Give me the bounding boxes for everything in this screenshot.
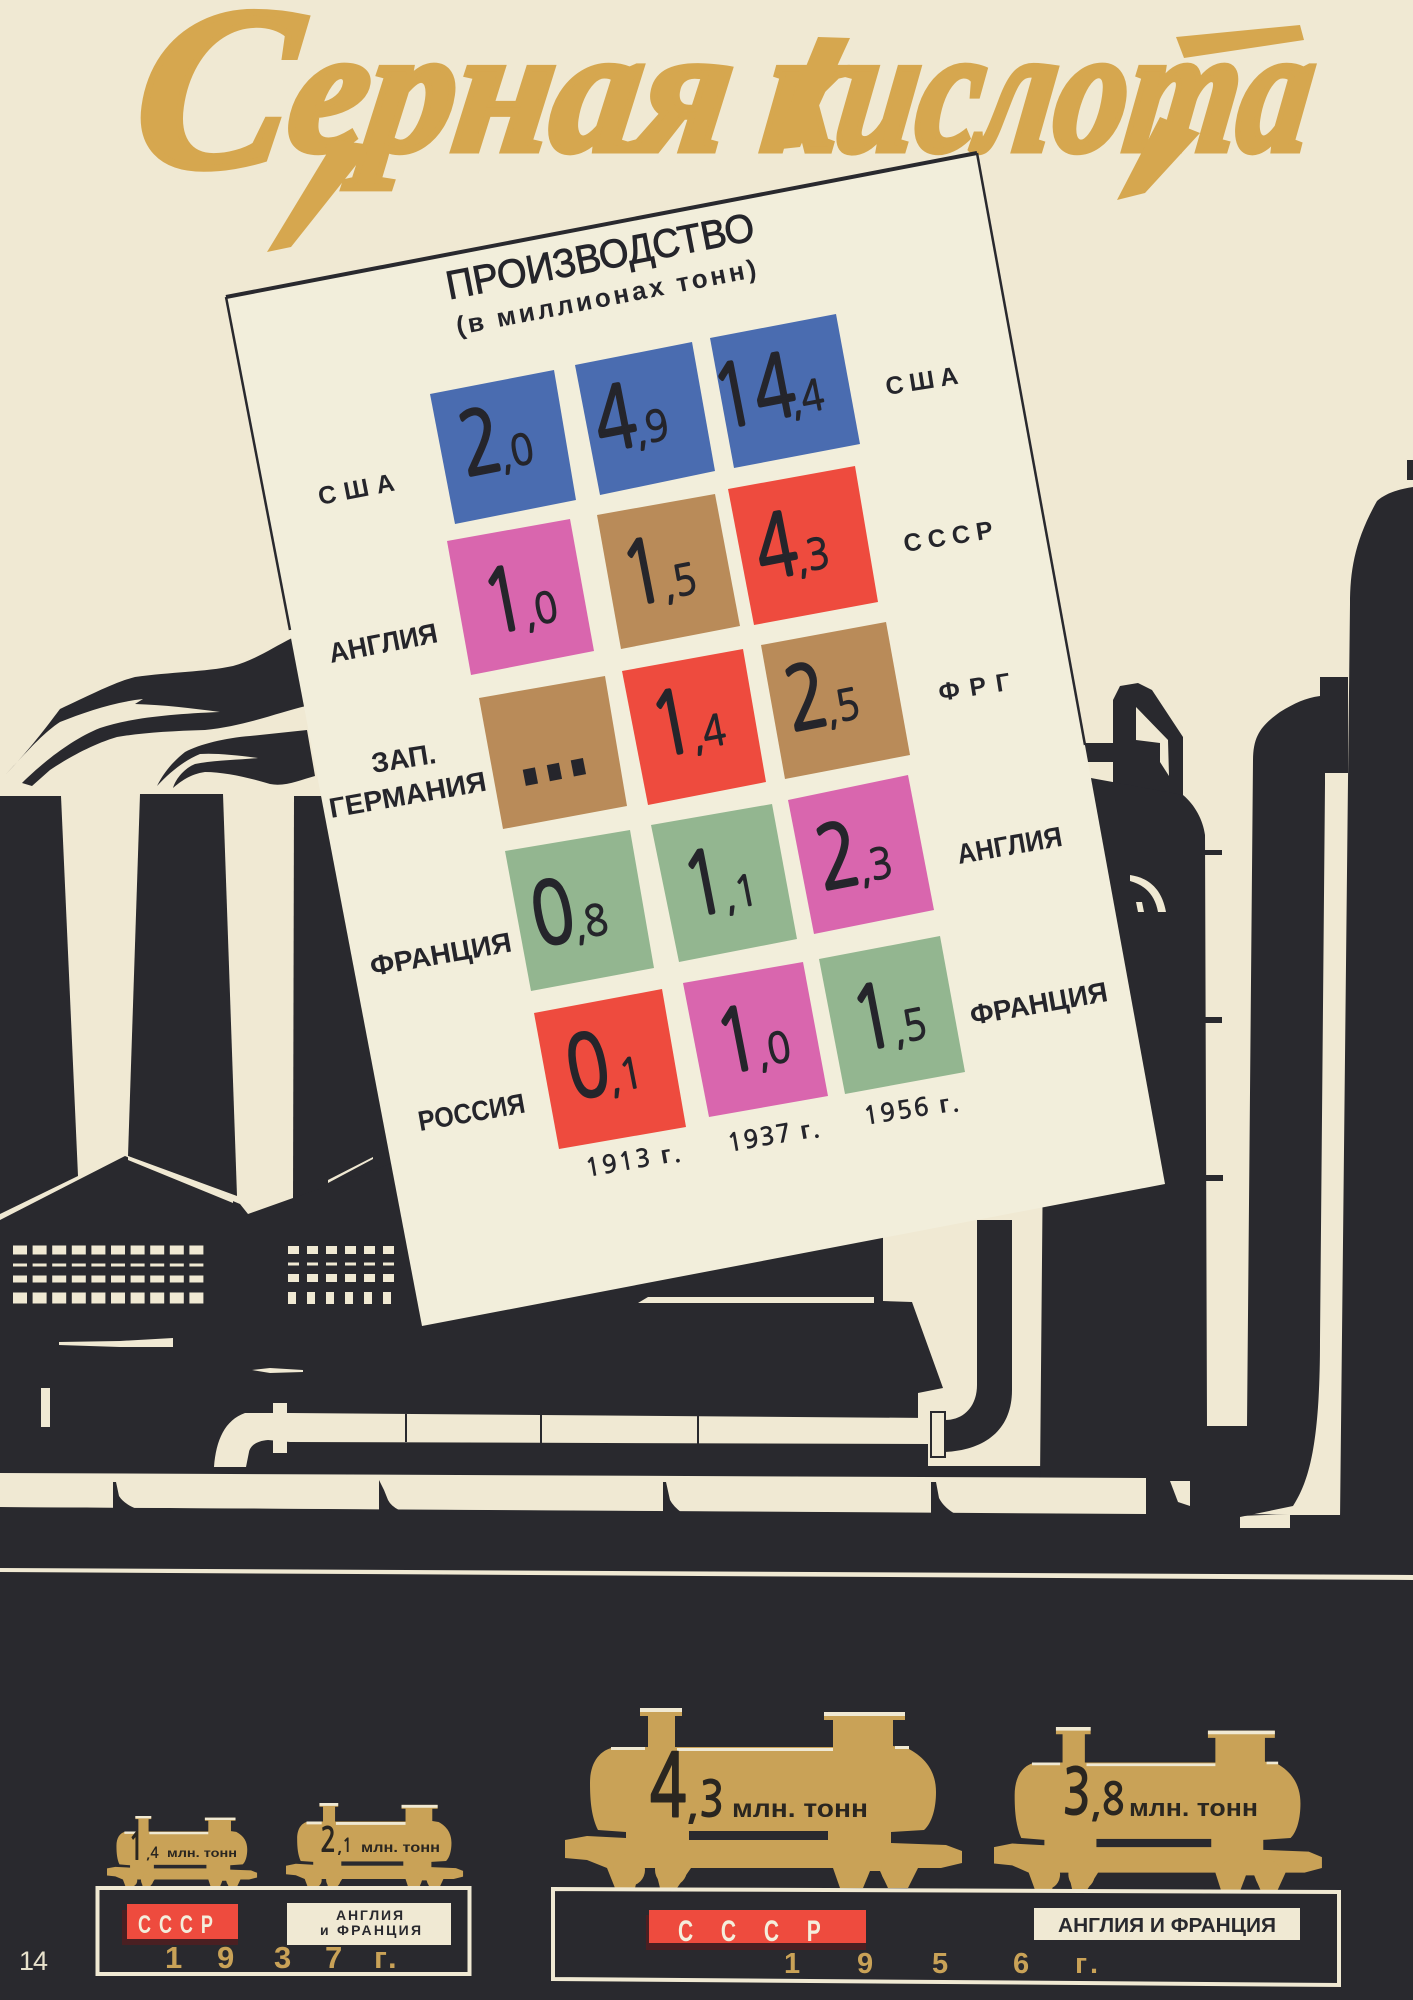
tile: США 1937 4,9: 4 [587,373,643,465]
tile: СССР 1956 4,3: ,3 [792,531,833,579]
tile: СССР 1956 4,3: 4 [748,501,804,593]
horizontal white pipe [214,1403,945,1467]
tank label: 1,4 млн. тонн: ,4 [146,1847,159,1861]
tank label: 1,4 млн. тонн: млн. тонн [167,1846,237,1860]
right country labels: США [884,362,960,401]
building details and roof lines [0,1156,874,1427]
left country labels: ГЕРМАНИЯ [327,766,489,824]
card background [226,153,1165,1326]
tile: Франция 1913 0,8 [505,830,654,991]
tank label: 2,1 млн. тонн: ,1 [337,1836,353,1855]
dark strip under pipe [918,1466,1048,1479]
tile: Франция 1913 0,8: 0 [524,867,581,960]
year labels: 1913 г. [583,1140,682,1181]
window rows, left building [13,1250,207,1298]
tank car: СССР 1937 [107,1816,257,1887]
year labels: 1956 г. [862,1089,960,1129]
tile: США 1913 2,0: 2 [452,397,508,489]
paper band below the factory [0,1473,1190,1515]
tank label: 4,3 млн. тонн: ,3 [686,1775,725,1825]
tile: ФРГ 1956 2,5: 2 [778,652,834,744]
tile: Франция 1937 1,1: ,1 [720,868,761,916]
ground line [0,1568,1413,1580]
tank label: 3,8 млн. тонн [1062,1762,1258,1825]
year labels [583,1089,960,1181]
СССР 1956 label: СССР [678,1916,821,1948]
legend box: 1956 [553,1889,1339,1985]
left country labels: ФРАНЦИЯ [368,927,514,982]
right country labels: ФРГ [937,668,1012,707]
tank label: 1,4 млн. тонн: 1 [128,1828,145,1866]
tile: Англия 1956 2,3: ,3 [854,841,896,889]
tank label: 3,8 млн. тонн: 3 [1062,1762,1091,1825]
tile: США 1956 14,4: 14 [706,342,802,442]
tank label: 3,8 млн. тонн: млн. тонн [1129,1795,1258,1822]
right country labels: АНГЛИЯ [955,821,1064,870]
card heading: (в миллионах тонн) [453,253,759,341]
tank label: 2,1 млн. тонн [320,1823,440,1858]
СССР 1937 label [122,1904,238,1945]
tile: Франция 1956 1,5 [819,936,965,1094]
support ticks [113,1478,1170,1515]
page number: 14 [19,1946,48,1976]
tower highlights [1130,875,1166,912]
left country labels [316,469,527,1137]
right pipe flange [931,1412,945,1457]
tile: США 1956 14,4 [706,314,860,468]
tile: СССР 1956 4,3 [728,466,878,625]
tank car: Англия и Франция 1956 [994,1727,1322,1891]
tile: США 1937 4,9 [575,342,715,495]
right tall tank [1340,487,1413,1520]
right country labels: ФРАНЦИЯ [968,976,1110,1031]
tile: США 1956 14,4: ,4 [786,373,828,421]
chimney 1 [0,796,78,1230]
year 1956: 1956г. [784,1948,1098,1980]
left pipe flange [273,1403,287,1453]
tank label: 2,1 млн. тонн: 2 [320,1823,336,1858]
left country labels: США [316,469,397,511]
smoke from the second chimney [157,730,315,788]
Англия и Франция 1937 label [287,1903,451,1945]
tile: Россия 1913 0,1: ,1 [604,1051,646,1099]
year labels: 1937 г. [725,1115,821,1156]
year 1937: 1937г. [165,1940,397,1975]
right country labels: СССР [902,516,995,558]
middle tank [1207,677,1348,1517]
title: Серная кислота [122,0,1332,252]
tile: Зап. Германия 1913 no data: ... [501,677,597,811]
tile: Россия 1913 0,1: 0 [559,1020,616,1113]
factory silhouette [0,460,1413,2000]
tile: Франция 1956 1,5: ,5 [889,1002,930,1050]
right country labels [884,362,1110,1031]
tile: Англия 1913 1,0: ,0 [520,585,561,633]
tile: Англия 1956 2,3: 2 [809,810,866,903]
card heading: ПРОИЗВОДСТВО [442,205,758,308]
Англия и Франция 1956 label: АНГЛИЯ И ФРАНЦИЯ [1058,1915,1276,1937]
production card [226,153,1165,1326]
chimney 3 [293,796,430,1300]
tank label: 3,8 млн. тонн: ,8 [1090,1778,1125,1823]
СССР 1937 label: СССР [138,1910,213,1939]
tile: Франция 1937 1,1 [651,804,797,962]
tile: Англия 1956 2,3 [788,775,934,934]
tile: 1937 1,4 [622,649,766,805]
tower bar [1085,743,1160,762]
tank label: 4,3 млн. тонн [649,1745,868,1831]
tile: Франция 1913 0,8: ,8 [569,898,611,946]
tile: Франция 1956 1,5: 1 [845,972,901,1064]
tile: Англия 1913 1,0 [447,519,594,675]
tank top fragment [1407,460,1413,480]
tile: 1937 1,4: ,4 [688,708,729,756]
Англия и Франция 1937 label: и ФРАНЦИЯ [320,1922,421,1938]
tile: США 1913 2,0 [430,370,576,524]
tile: 1937 1,5 [597,494,740,649]
tank label: 1,4 млн. тонн [128,1828,237,1866]
distillation tower cap [1113,683,1183,800]
lower dark ground [0,1507,1413,2000]
tile: Англия 1937 1,0: ,0 [753,1025,794,1073]
window rows, right building [288,1250,398,1298]
tile: Англия 1937 1,0 [683,962,828,1117]
left country labels: ЗАП. [369,738,438,779]
Англия и Франция 1937 label: АНГЛИЯ [336,1907,403,1923]
tile: Зап. Германия 1913 no data [479,676,627,829]
tank label: 2,1 млн. тонн: млн. тонн [361,1840,440,1855]
tile: США 1937 4,9: ,9 [631,403,672,451]
tank label: 4,3 млн. тонн: млн. тонн [732,1795,868,1823]
tile: Россия 1913 0,1 [534,989,686,1149]
tile: 1937 1,5: 1 [615,527,671,619]
left country labels: АНГЛИЯ [326,617,440,669]
tile: ФРГ 1956 2,5 [761,622,910,779]
tile: 1937 1,5: ,5 [659,557,700,605]
tile: ФРГ 1956 2,5: ,5 [822,682,863,730]
tank car: Англия и Франция 1937 [286,1803,463,1888]
paper notch at tower base [1240,1512,1340,1528]
dark base between band and tank [1146,1478,1246,1518]
card border lines [226,153,977,297]
tile: США 1913 2,0: ,0 [496,427,537,475]
left country labels: РОССИЯ [416,1088,527,1137]
factory building [0,1150,943,1480]
chimney 2 [128,794,237,1196]
tower bolts [1205,850,1223,1181]
legend box: 1937 [98,1888,470,1975]
tank car: СССР 1956 [565,1708,962,1888]
tile: 1937 1,4: 1 [644,678,700,770]
Англия и Франция 1956 label [1034,1908,1300,1940]
vertical pipe elbow [945,1220,1012,1452]
tile: Франция 1937 1,1: 1 [676,838,732,930]
tile: Англия 1913 1,0: 1 [476,555,532,647]
tile: Англия 1937 1,0: 1 [709,995,765,1087]
distillation tower [1040,776,1207,1480]
tank label: 4,3 млн. тонн: 4 [649,1745,687,1831]
СССР 1956 label [646,1910,866,1950]
smoke from the first chimney [2,638,306,786]
gap under tower bar [1092,765,1108,775]
